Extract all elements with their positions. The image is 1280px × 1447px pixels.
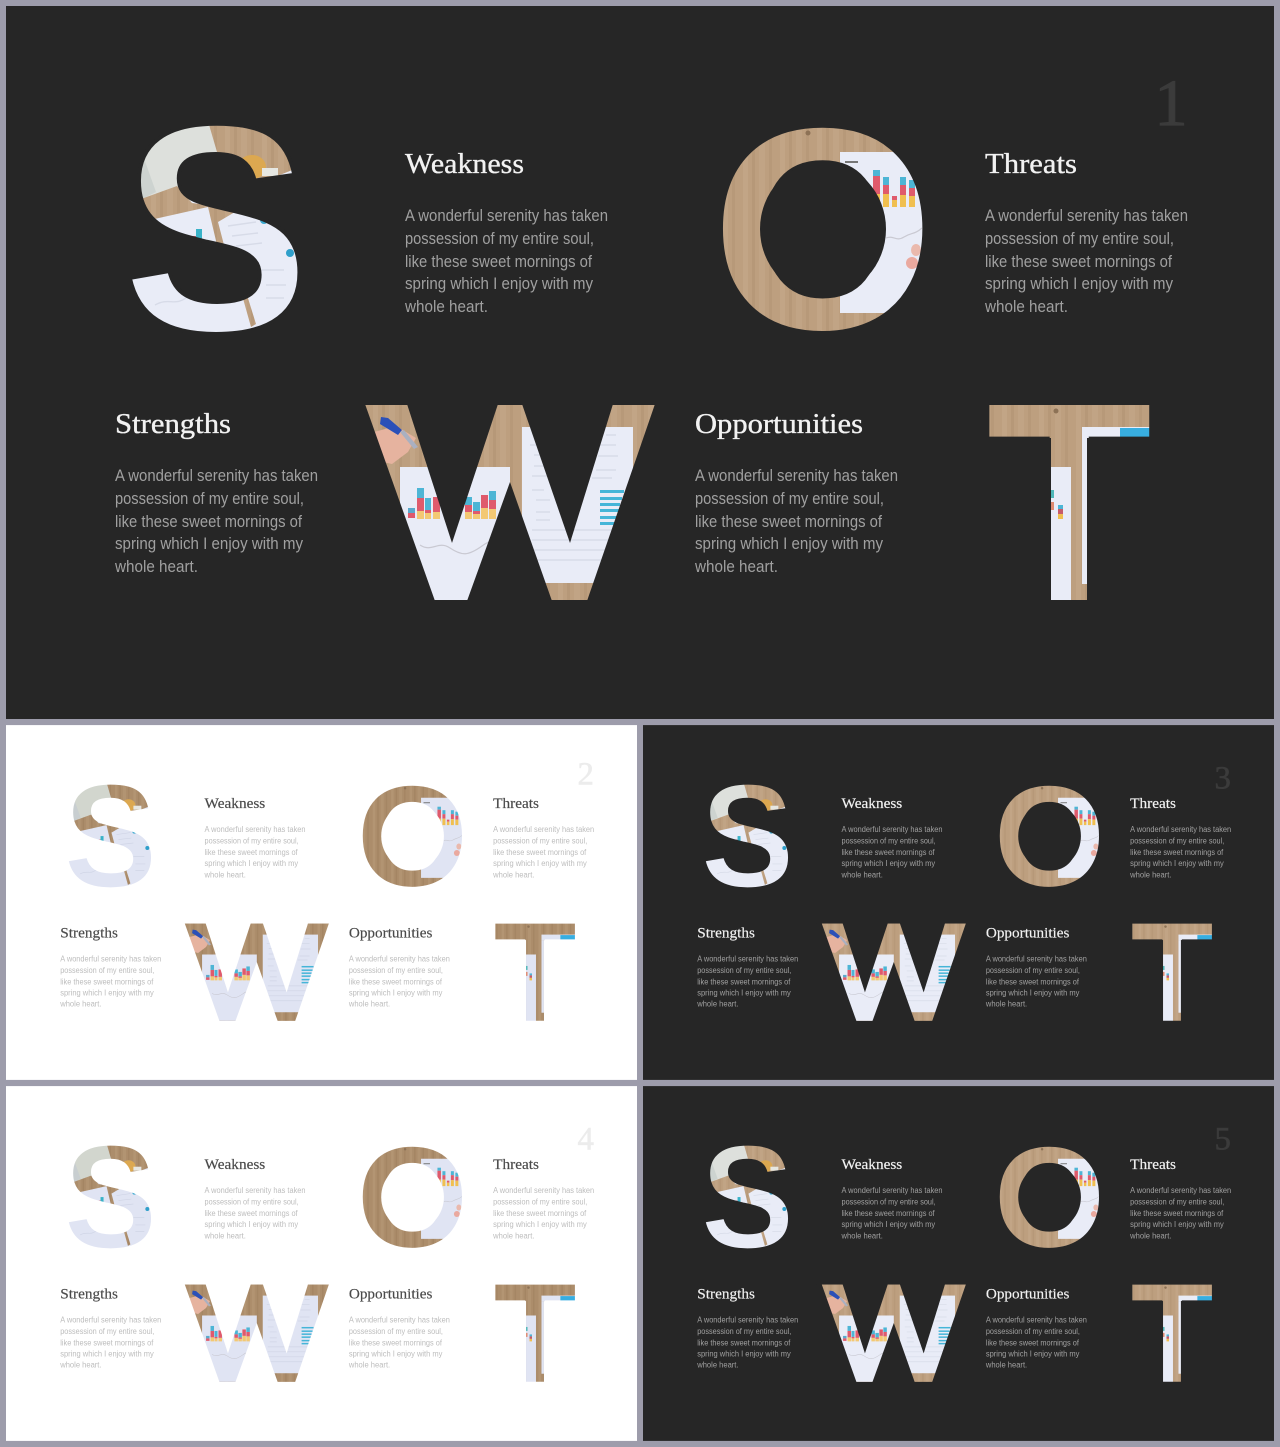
body: Opportunities: whole heart. (985, 1361, 1027, 1370)
body: Opportunities: like these sweet mornings of (986, 1338, 1080, 1347)
text block: Weakness (841, 1157, 943, 1240)
body: Threats: whole heart. (1129, 870, 1171, 879)
body: Opportunities: possession of my entire soul, (986, 966, 1080, 975)
body: Weakness: spring which I enjoy with my (405, 275, 594, 293)
body: Threats: possession of my entire soul, (493, 1198, 587, 1207)
body: Strengths (696, 1315, 799, 1370)
body: Weakness: A wonderful serenity has taken (205, 825, 306, 834)
heading: Weakness: Weakness (405, 148, 524, 180)
letter O (1000, 1146, 1099, 1248)
text block: Opportunities (348, 926, 450, 1009)
heading: Strengths: Strengths (60, 926, 118, 942)
body: Weakness: like these sweet mornings of (842, 848, 935, 857)
body: Threats: spring which I enjoy with my (493, 1220, 588, 1229)
body: Weakness: whole heart. (204, 870, 246, 879)
body: Threats: like these sweet mornings of (1130, 1209, 1224, 1218)
body: Threats: possession of my entire soul, (1130, 1198, 1224, 1207)
body: Weakness (404, 207, 608, 316)
letter T (989, 405, 1150, 600)
body: Weakness: possession of my entire soul, (205, 837, 299, 846)
body: Strengths: A wonderful serenity has taken (60, 954, 162, 963)
letter W (822, 1284, 966, 1382)
body: Weakness: like these sweet mornings of (205, 1209, 298, 1218)
body: Threats (492, 1186, 595, 1240)
body: Opportunities: A wonderful serenity has taken (986, 1315, 1087, 1324)
heading: Opportunities: Opportunities (695, 408, 863, 440)
panel: slide 4 light (6, 1086, 637, 1441)
body: Weakness: like these sweet mornings of (842, 1209, 935, 1218)
body: Threats: A wonderful serenity has taken (1130, 1186, 1232, 1195)
body: Threats: spring which I enjoy with my (493, 859, 588, 868)
heading: Weakness: Weakness (842, 796, 903, 812)
body: Opportunities: whole heart. (348, 1361, 390, 1370)
text block: Opportunities (694, 408, 898, 576)
body: Opportunities: A wonderful serenity has taken (695, 467, 898, 485)
text block: Threats (492, 1157, 595, 1240)
body: Threats: possession of my entire soul, (1130, 837, 1224, 846)
body: Threats: possession of my entire soul, (493, 837, 587, 846)
body: Weakness: possession of my entire soul, (842, 1198, 936, 1207)
body: Opportunities (348, 1315, 450, 1370)
letter W (822, 924, 966, 1021)
body: Opportunities (694, 467, 898, 576)
body: Threats (984, 207, 1188, 316)
heading: Strengths: Strengths (697, 926, 755, 942)
body: Opportunities: whole heart. (985, 1000, 1027, 1009)
body: Strengths: spring which I enjoy with my (60, 1349, 155, 1358)
body: Weakness: A wonderful serenity has taken (205, 1186, 306, 1195)
body: Strengths (696, 954, 799, 1009)
letter S: S (64, 1114, 157, 1280)
body: Opportunities: like these sweet mornings of (349, 1338, 443, 1347)
body: Weakness: possession of my entire soul, (205, 1198, 299, 1207)
text block: Threats (984, 148, 1188, 316)
body: Threats: spring which I enjoy with my (1130, 1220, 1225, 1229)
number 2: 2 (578, 756, 594, 792)
body: Weakness: like these sweet mornings of (205, 848, 298, 857)
body: Strengths: A wonderful serenity has taken (60, 1315, 162, 1324)
panel: slide 2 light (6, 725, 637, 1080)
body: Strengths: possession of my entire soul, (60, 966, 154, 975)
body: Weakness: A wonderful serenity has taken (842, 825, 943, 834)
body: Weakness: spring which I enjoy with my (842, 859, 936, 868)
text block: Opportunities (348, 1287, 450, 1370)
letter S (132, 126, 298, 332)
heading: Threats: Threats (493, 1157, 539, 1173)
body: Opportunities: like these sweet mornings of (986, 977, 1080, 986)
body: Opportunities (348, 954, 450, 1009)
body: Opportunities: possession of my entire soul, (349, 1327, 443, 1336)
text block: Opportunities (985, 926, 1087, 1009)
body: Strengths: like these sweet mornings of (60, 1338, 154, 1347)
heading: Weakness: Weakness (842, 1157, 903, 1173)
number 5: 5 (1215, 1121, 1231, 1157)
body: Strengths: possession of my entire soul, (60, 1327, 154, 1336)
body: Strengths: spring which I enjoy with my (697, 1349, 792, 1358)
body: Opportunities: spring which I enjoy with my (986, 1349, 1080, 1358)
body: Weakness: like these sweet mornings of (405, 253, 592, 271)
body: Strengths (59, 954, 162, 1009)
text block: Strengths (696, 926, 799, 1009)
body: Strengths: like these sweet mornings of (60, 977, 154, 986)
body: Opportunities: possession of my entire soul, (986, 1327, 1080, 1336)
letter O (362, 786, 462, 887)
letter O (362, 1146, 462, 1248)
letter T (493, 921, 578, 1023)
heading: Opportunities: Opportunities (349, 1287, 433, 1303)
number 3: 3 (1215, 760, 1231, 796)
heading: Strengths: Strengths (115, 408, 231, 440)
heading: Weakness: Weakness (205, 796, 266, 812)
text block: Strengths (59, 1287, 162, 1370)
body: Threats: whole heart. (492, 1231, 534, 1240)
text block: Threats (492, 796, 595, 879)
letter S (706, 784, 788, 888)
text block: Weakness (841, 796, 943, 879)
body: Threats: A wonderful serenity has taken (1130, 825, 1232, 834)
body: Weakness (204, 1186, 306, 1240)
text block: Weakness (204, 796, 306, 879)
text block: Weakness (204, 1157, 306, 1240)
body: Threats: A wonderful serenity has taken (985, 207, 1188, 225)
heading: Threats: Threats (493, 796, 539, 812)
body: Weakness: possession of my entire soul, (405, 230, 594, 248)
body: Strengths (59, 1315, 162, 1370)
letter S (69, 1146, 151, 1248)
body: Threats: spring which I enjoy with my (1130, 859, 1225, 868)
body: Strengths: like these sweet mornings of (697, 977, 791, 986)
letter W (365, 405, 655, 600)
number 1: 1 (1154, 67, 1188, 140)
letter T (1130, 1282, 1215, 1384)
body: Weakness: spring which I enjoy with my (842, 1220, 936, 1229)
body: Weakness (841, 1186, 943, 1240)
body: Opportunities: spring which I enjoy with my (349, 1349, 443, 1358)
body: Opportunities: A wonderful serenity has taken (986, 954, 1087, 963)
body: Opportunities: like these sweet mornings of (695, 513, 882, 531)
body: Threats (492, 825, 595, 879)
body: Strengths: possession of my entire soul, (697, 966, 791, 975)
panel: slide 5 dark (643, 1086, 1274, 1441)
body: Weakness: A wonderful serenity has taken (405, 207, 608, 225)
letter T (1130, 921, 1215, 1023)
letter S: S (701, 753, 794, 919)
text block: Weakness (404, 148, 608, 316)
body: Opportunities: spring which I enjoy with my (349, 988, 443, 997)
heading: Weakness: Weakness (205, 1157, 266, 1173)
heading: Threats: Threats (1130, 796, 1176, 812)
heading: Strengths: Strengths (697, 1287, 755, 1303)
text block: Threats (1129, 1157, 1232, 1240)
letter T (493, 1282, 578, 1384)
body: Strengths: A wonderful serenity has taken (115, 467, 318, 485)
body: Weakness: whole heart. (841, 870, 883, 879)
heading: Threats: Threats (985, 148, 1077, 180)
body: Weakness: whole heart. (841, 1231, 883, 1240)
body: Threats: A wonderful serenity has taken (493, 825, 595, 834)
body: Opportunities (985, 954, 1087, 1009)
body: Threats: whole heart. (984, 298, 1068, 316)
heading: Opportunities: Opportunities (986, 926, 1070, 942)
letter W (184, 1284, 329, 1382)
number 4: 4 (578, 1121, 594, 1157)
body: Threats: like these sweet mornings of (1130, 848, 1224, 857)
letter S (69, 784, 151, 888)
body: Strengths: spring which I enjoy with my (60, 988, 155, 997)
body: Strengths: A wonderful serenity has taken (697, 1315, 799, 1324)
body: Opportunities: whole heart. (348, 1000, 390, 1009)
letter S: S (122, 64, 310, 395)
letter O (1000, 786, 1099, 887)
body: Strengths: like these sweet mornings of (115, 513, 302, 531)
body: Strengths: whole heart. (696, 1361, 739, 1370)
body: Weakness (841, 825, 943, 879)
panel: slide 1 dark main (6, 6, 1274, 719)
body: Opportunities: possession of my entire soul, (349, 966, 443, 975)
body: Opportunities: like these sweet mornings of (349, 977, 443, 986)
body: Threats: like these sweet mornings of (493, 1209, 587, 1218)
body: Threats: A wonderful serenity has taken (493, 1186, 595, 1195)
text block: Threats (1129, 796, 1232, 879)
body: Strengths: A wonderful serenity has taken (697, 954, 799, 963)
text block: Strengths (59, 926, 162, 1009)
body: Strengths: possession of my entire soul, (115, 490, 304, 508)
body: Opportunities: whole heart. (694, 558, 778, 576)
body: Strengths: possession of my entire soul, (697, 1327, 791, 1336)
body: Strengths (114, 467, 318, 576)
body: Strengths: spring which I enjoy with my (115, 535, 304, 553)
body: Weakness: whole heart. (204, 1231, 246, 1240)
body: Opportunities: A wonderful serenity has taken (349, 1315, 450, 1324)
body: Opportunities: spring which I enjoy with my (695, 535, 884, 553)
letter S: S (64, 753, 157, 919)
body: Strengths: whole heart. (59, 1361, 102, 1370)
heading: Opportunities: Opportunities (349, 926, 433, 942)
body: Strengths: like these sweet mornings of (697, 1338, 791, 1347)
body: Opportunities (985, 1315, 1087, 1370)
letter S (706, 1146, 788, 1248)
body: Threats: spring which I enjoy with my (985, 275, 1174, 293)
heading: Opportunities: Opportunities (986, 1287, 1070, 1303)
letter W (184, 924, 329, 1021)
body: Weakness: spring which I enjoy with my (205, 859, 299, 868)
body: Weakness: whole heart. (404, 298, 488, 316)
body: Opportunities: possession of my entire soul, (695, 490, 884, 508)
heading: Threats: Threats (1130, 1157, 1176, 1173)
body: Weakness: possession of my entire soul, (842, 837, 936, 846)
body: Threats: whole heart. (492, 870, 534, 879)
text block: Strengths (696, 1287, 799, 1370)
body: Weakness: spring which I enjoy with my (205, 1220, 299, 1229)
body: Weakness (204, 825, 306, 879)
text block: Opportunities (985, 1287, 1087, 1370)
letter S: S (701, 1114, 794, 1280)
panel: slide 3 dark (643, 725, 1274, 1080)
body: Threats (1129, 1186, 1232, 1240)
body: Threats: possession of my entire soul, (985, 230, 1174, 248)
body: Strengths: spring which I enjoy with my (697, 988, 792, 997)
body: Weakness: A wonderful serenity has taken (842, 1186, 943, 1195)
body: Strengths: whole heart. (696, 1000, 739, 1009)
body: Threats: like these sweet mornings of (493, 848, 587, 857)
heading: Strengths: Strengths (60, 1287, 118, 1303)
text block: Strengths (114, 408, 318, 576)
letter O (722, 128, 922, 331)
body: Threats: like these sweet mornings of (985, 253, 1172, 271)
body: Opportunities: spring which I enjoy with my (986, 988, 1080, 997)
body: Opportunities: A wonderful serenity has taken (349, 954, 450, 963)
body: Threats: whole heart. (1129, 1231, 1171, 1240)
body: Strengths: whole heart. (114, 558, 198, 576)
body: Strengths: whole heart. (59, 1000, 102, 1009)
body: Threats (1129, 825, 1232, 879)
